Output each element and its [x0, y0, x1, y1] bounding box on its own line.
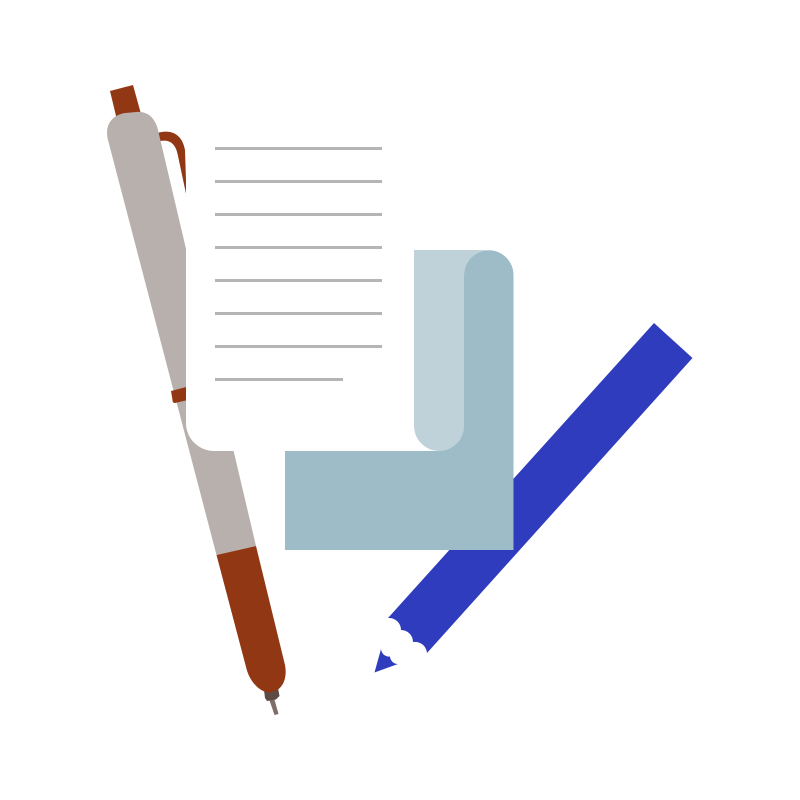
- pen nib collar: [264, 688, 280, 701]
- pen clip: [157, 132, 186, 196]
- icon: ballpoint pen: [107, 85, 286, 715]
- pencil tip: [374, 649, 398, 672]
- paper back fold: [285, 250, 514, 550]
- paper scroll: [186, 100, 514, 550]
- paper sheet: [186, 100, 439, 451]
- text lines: [215, 147, 382, 381]
- icon: blue pencil: [374, 323, 692, 672]
- paper curl highlight: [414, 250, 489, 451]
- pen band: [171, 386, 192, 403]
- pencil body: [388, 323, 692, 653]
- pen nib tip: [269, 698, 278, 715]
- pen barrel: [107, 112, 256, 555]
- pen grip: [216, 546, 286, 693]
- pen clicker: [110, 85, 141, 120]
